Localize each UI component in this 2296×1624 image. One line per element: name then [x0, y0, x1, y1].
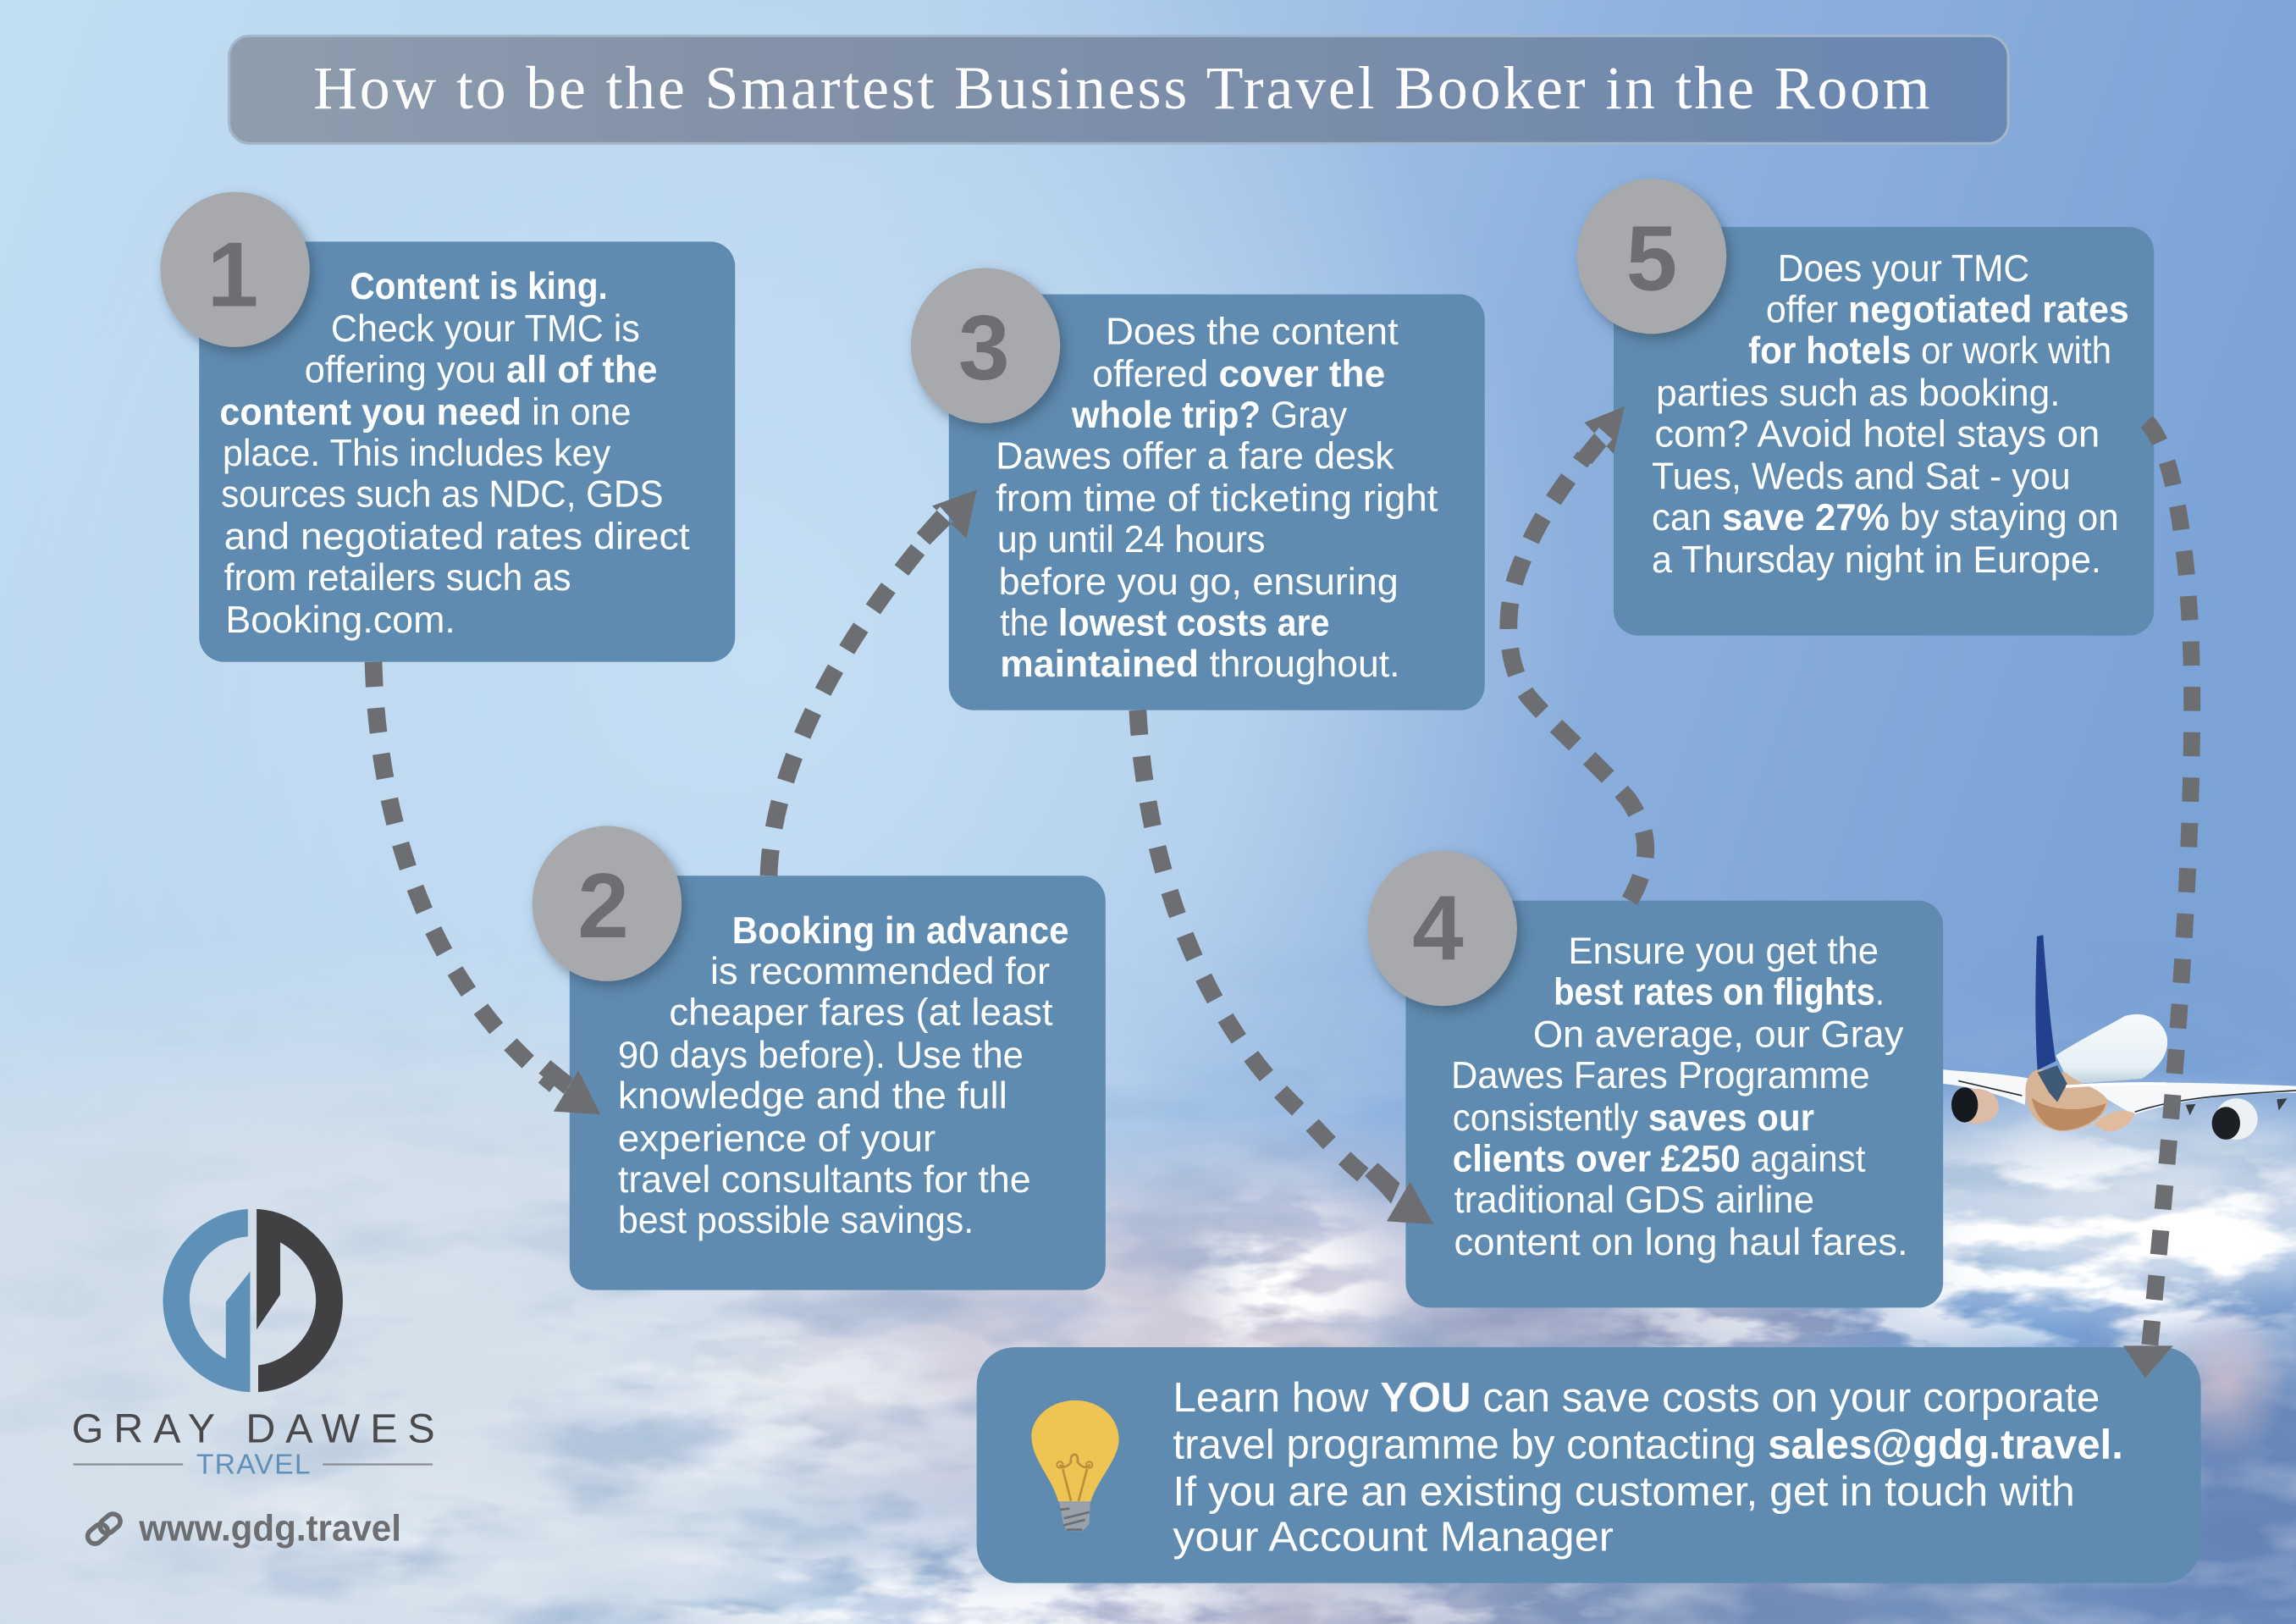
- panel 2: booking in advance: experience of your: [618, 1118, 936, 1159]
- panel 4: best rates on flights: consistently saves our: [1453, 1097, 1814, 1139]
- panel 1: content is king: Booking.com.: [225, 599, 455, 641]
- panel 3: cover the whole trip: Dawes offer a fare desk: [996, 435, 1395, 477]
- panel 1: content is king: offering you all of the: [305, 349, 658, 390]
- panel 5: negotiated hotel rates: com? Avoid hotel stays on: [1654, 413, 2100, 455]
- image: airplane: [1943, 935, 2296, 1140]
- panel 4: best rates on flights: On average, our Gray: [1533, 1014, 1903, 1056]
- arrow: step 1 to step 2: [373, 662, 600, 1114]
- panel 5: negotiated hotel rates: a Thursday night in Europe.: [1652, 539, 2101, 581]
- icon: light bulb: [1031, 1400, 1119, 1531]
- title bar: How to be the Smartest Business Travel Booker in the Room: [313, 54, 1930, 122]
- panel 1: content is king: from retailers such as: [224, 557, 571, 599]
- step badge 5: [1577, 179, 1726, 334]
- logo wordmark: GRAY DAWES: [72, 1406, 435, 1452]
- arrow: step 3 to step 4: [1138, 710, 1433, 1224]
- panel 3: cover the whole trip: [949, 295, 1485, 710]
- panel 3: cover the whole trip: from time of ticketing right: [996, 478, 1438, 520]
- panel 5: negotiated hotel rates: parties such as booking.: [1656, 373, 2061, 414]
- arrow: step 4 to step 5: [1509, 406, 1646, 901]
- step badge 5: 5: [1626, 207, 1677, 310]
- panel 2: booking in advance: [570, 876, 1106, 1290]
- panel 1: content is king: and negotiated rates direct: [224, 516, 690, 558]
- panel 4: best rates on flights: [1405, 901, 1943, 1307]
- plane wings: [1943, 1069, 2296, 1115]
- step badge 3: [911, 268, 1060, 423]
- panel: call to action: travel programme by contacting sales@gdg.travel.: [1173, 1422, 2123, 1468]
- panel 5: negotiated hotel rates: [1614, 227, 2154, 636]
- panel 3: cover the whole trip: before you go, ensuring: [999, 561, 1399, 603]
- panel: call to action: Learn how YOU can save costs on your corporate: [1173, 1374, 2100, 1421]
- panel 4: best rates on flights: content on long haul fares.: [1454, 1222, 1908, 1263]
- panel 5: negotiated hotel rates: for hotels or work with: [1748, 330, 2111, 372]
- panel 4: best rates on flights: Ensure you get the: [1568, 931, 1879, 972]
- panel 1: content is king: Check your TMC is: [331, 308, 640, 350]
- panel: call to action: If you are an existing customer, get in touch with: [1173, 1468, 2075, 1515]
- step badge 4: [1367, 851, 1517, 1006]
- panel 5: negotiated hotel rates: Tues, Weds and Sat - you: [1652, 456, 2071, 498]
- step badge 1: [160, 192, 310, 347]
- panel 3: cover the whole trip: maintained throughout.: [1000, 644, 1399, 685]
- panel 2: booking in advance: best possible savings.: [618, 1200, 974, 1241]
- panel 5: negotiated hotel rates: Does your TMC: [1778, 248, 2029, 290]
- logo mark: [163, 1209, 343, 1392]
- arrow: step 2 to step 3: [769, 490, 977, 876]
- step badge 4: 4: [1412, 876, 1464, 980]
- panel 2: booking in advance: cheaper fares (at least: [669, 992, 1053, 1034]
- step badge 3: 3: [958, 296, 1010, 400]
- panel 3: cover the whole trip: offered cover the: [1092, 354, 1385, 395]
- plane left engine: [1955, 1089, 1999, 1124]
- plane tail fin: [2035, 935, 2056, 1070]
- panel 2: booking in advance: travel consultants for the: [618, 1159, 1031, 1201]
- panel 5: negotiated hotel rates: can save 27% by staying on: [1652, 497, 2119, 539]
- step badge 2: [533, 826, 682, 981]
- panel 4: best rates on flights: traditional GDS airline: [1454, 1179, 1814, 1221]
- panel 5: negotiated hotel rates: offer negotiated rates: [1766, 289, 2129, 330]
- panel 3: cover the whole trip: Does the content: [1106, 311, 1399, 352]
- panel: call to action: [977, 1347, 2201, 1583]
- step badge 1: 1: [207, 223, 258, 326]
- panel 3: cover the whole trip: the lowest costs are: [1000, 603, 1329, 644]
- icon: chain link: [85, 1511, 124, 1547]
- panel 1: content is king: content you need in one: [219, 392, 631, 434]
- panel 3: cover the whole trip: whole trip? Gray: [1071, 395, 1347, 436]
- panel 3: cover the whole trip: up until 24 hours: [997, 519, 1265, 561]
- panel 2: booking in advance: 90 days before). Use the: [618, 1035, 1024, 1076]
- panel 4: best rates on flights: clients over £250 against: [1453, 1139, 1866, 1180]
- panel 4: best rates on flights: Dawes Fares Programme: [1451, 1055, 1870, 1096]
- panel 1: content is king: place. This includes key: [223, 433, 610, 474]
- logo sub-brand: TRAVEL: [196, 1449, 311, 1481]
- website link: www.gdg.travel: [138, 1508, 401, 1549]
- panel 2: booking in advance: Booking in advance: [732, 910, 1069, 952]
- panel 1: content is king: Content is king.: [350, 266, 608, 307]
- panel 2: booking in advance: is recommended for: [710, 951, 1050, 992]
- step badge 2: 2: [577, 854, 629, 958]
- logo: Gray Dawes Travel: [72, 1209, 435, 1481]
- panel: call to action: your Account Manager: [1173, 1514, 1614, 1560]
- arrow: step 5 to call to action: [2123, 422, 2192, 1378]
- panel 2: booking in advance: knowledge and the full: [618, 1075, 1007, 1117]
- panel 4: best rates on flights: best rates on flights.: [1554, 971, 1885, 1013]
- panel 1: content is king: sources such as NDC, GDS: [221, 473, 664, 515]
- plane rear body: [2025, 1069, 2108, 1131]
- title bar: [229, 36, 2008, 143]
- plane right engine: [2216, 1098, 2258, 1140]
- plane fuselage: [2056, 1014, 2167, 1085]
- plane wing pylons: [2186, 1098, 2288, 1115]
- panel 1: content is king: [199, 241, 735, 662]
